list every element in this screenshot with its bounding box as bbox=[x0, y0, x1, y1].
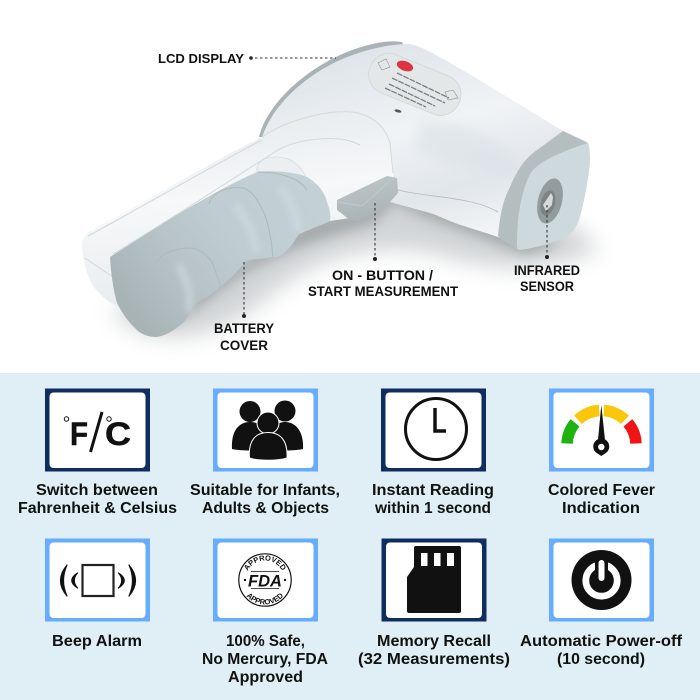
feature: switch between fahrenheit and celsius: Fahrenheit & Celsius bbox=[18, 500, 177, 517]
callout: battery cover: COVER bbox=[220, 338, 268, 353]
feature: suitable for infants adults objects: Suitable for Infants, bbox=[190, 482, 340, 499]
feature: instant reading: within 1 second bbox=[374, 500, 491, 517]
callout: lcd display bbox=[158, 51, 336, 66]
feature: memory recall: (32 Measurements) bbox=[358, 651, 510, 668]
front face bbox=[517, 143, 590, 250]
feature: switch between fahrenheit and celsius: Switch between bbox=[36, 482, 158, 499]
feature: fda approved bbox=[202, 538, 328, 686]
feature: fda approved: 100% Safe, bbox=[226, 633, 305, 650]
sensor slot bbox=[394, 109, 402, 113]
handle body bbox=[82, 112, 396, 307]
feature: colored fever indication: Indication bbox=[562, 500, 640, 517]
feature: switch between fahrenheit and celsius: C bbox=[105, 416, 131, 452]
callout: on button bbox=[308, 203, 459, 299]
collar outline bbox=[262, 112, 393, 173]
callout: battery cover bbox=[214, 262, 274, 353]
feature: memory recall: Memory Recall bbox=[377, 633, 491, 650]
callout: infrared sensor bbox=[514, 205, 580, 294]
feature: automatic power off bbox=[520, 538, 683, 668]
feature: suitable for infants adults objects bbox=[190, 388, 340, 517]
feature: switch between fahrenheit and celsius: F bbox=[70, 416, 88, 452]
callout: on button: ON - BUTTON / bbox=[332, 268, 433, 283]
callout: infrared sensor: SENSOR bbox=[520, 279, 574, 294]
feature: fda approved: FDA bbox=[248, 572, 282, 590]
on button trigger bbox=[337, 176, 398, 222]
feature: suitable for infants adults objects: Adults & Objects bbox=[202, 500, 329, 517]
lower seam bbox=[398, 190, 498, 212]
head body bbox=[262, 44, 586, 250]
feature: instant reading: Instant Reading bbox=[372, 482, 494, 499]
instruction sticker bbox=[363, 47, 467, 121]
feature: memory recall bbox=[358, 538, 510, 668]
feature: automatic power off: (10 second) bbox=[557, 651, 645, 668]
head shading bbox=[415, 120, 520, 174]
callout: on button: START MEASUREMENT bbox=[308, 284, 459, 299]
handle contour lines bbox=[85, 139, 360, 279]
feature: colored fever indication bbox=[548, 388, 655, 517]
feature: automatic power off: Automatic Power-off bbox=[520, 633, 683, 650]
feature: fda approved: Approved bbox=[228, 669, 303, 686]
rear grey edge of head bbox=[259, 41, 404, 137]
feature: beep alarm bbox=[45, 538, 150, 650]
feature: colored fever indication: Colored Fever bbox=[548, 482, 655, 499]
feature: beep alarm: Beep Alarm bbox=[52, 633, 142, 650]
battery cover grip bbox=[110, 171, 330, 337]
feature: fda approved: No Mercury, FDA bbox=[202, 651, 328, 668]
callout: infrared sensor: INFRARED bbox=[514, 263, 580, 278]
feature: fda approved: APPROVED bbox=[246, 594, 282, 605]
device contact shadow bbox=[170, 190, 560, 325]
feature: instant reading bbox=[372, 388, 494, 517]
infrared sensor lens bbox=[533, 176, 567, 226]
feature: fda approved: APPROVED bbox=[244, 555, 286, 571]
thumb recess bbox=[257, 157, 306, 177]
front grey band bbox=[498, 131, 588, 250]
callout: battery cover: BATTERY bbox=[214, 321, 274, 336]
panel: features background bbox=[0, 373, 700, 700]
device soft shadow bbox=[110, 195, 600, 337]
feature: switch between fahrenheit and celsius bbox=[18, 388, 177, 517]
product illustration: infrared thermometer bbox=[82, 41, 600, 337]
callout: lcd display: LCD DISPLAY bbox=[158, 51, 244, 66]
